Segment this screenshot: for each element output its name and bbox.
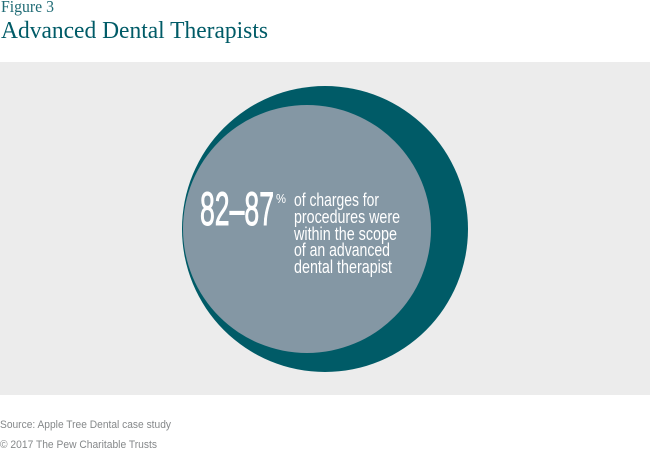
source note: Source: Apple Tree Dental case study bbox=[0, 419, 171, 431]
percent sign: % bbox=[276, 191, 286, 206]
panel: grey background bbox=[0, 62, 650, 395]
callout: statistic bbox=[200, 182, 400, 277]
description text: of charges for bbox=[294, 189, 379, 210]
description text bbox=[293, 189, 400, 277]
big number: 82–87 bbox=[200, 182, 274, 235]
description text: procedures were bbox=[294, 206, 400, 227]
description text: of an advanced bbox=[294, 239, 390, 260]
chart: proportional circles bbox=[182, 86, 468, 372]
description text: within the scope bbox=[293, 223, 397, 244]
outer circle: all charges bbox=[182, 86, 468, 372]
description text: dental therapist bbox=[294, 256, 392, 277]
title: Advanced Dental Therapists bbox=[1, 18, 268, 44]
inner circle: share within scope bbox=[183, 105, 431, 353]
